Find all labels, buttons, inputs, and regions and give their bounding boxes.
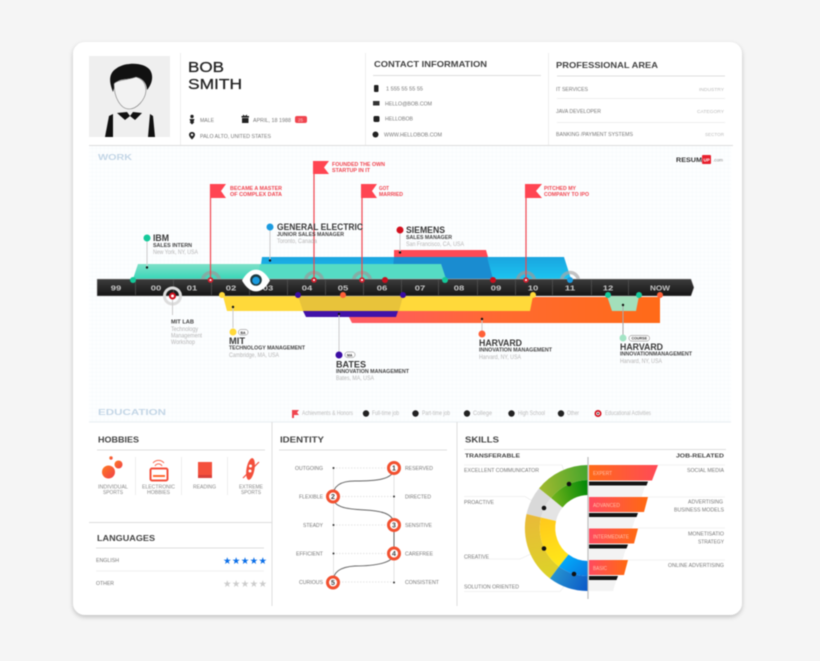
year labels: 99 [111, 286, 121, 292]
language: english: ENGLISH [96, 558, 119, 564]
job: General Electric: GENERAL ELECTRIC [277, 222, 363, 232]
education: Harvard: HARVARD [479, 338, 522, 348]
job: Siemens: San Francisco, CA, USA [406, 242, 464, 248]
legend: Full-time job [372, 411, 400, 417]
year labels: 12 [603, 286, 613, 292]
end dots [332, 467, 395, 584]
label: individual sports: SPORTS [103, 490, 124, 496]
marker numbers: 5 [331, 580, 335, 587]
logo: resumup: RESUM [676, 157, 702, 164]
timeline bar [97, 279, 694, 296]
job: IBM: New York, NY, USA [153, 250, 198, 256]
job: General Electric: Toronto, Canada [277, 239, 318, 245]
icon: extreme sports [243, 457, 259, 481]
icon: mail [373, 101, 380, 106]
heading: SKILLS [465, 434, 499, 444]
age badge [295, 116, 307, 123]
industry row [556, 87, 724, 93]
year labels [111, 286, 670, 292]
job: Siemens: SIEMENS [406, 225, 445, 235]
education bands [223, 296, 660, 323]
education: MIT: Cambridge, MA, USA [229, 353, 279, 359]
language: english [96, 556, 267, 567]
job: IBM: IBM [153, 233, 169, 243]
education: MIT Lab: Technology [171, 327, 198, 333]
category row: JAVA DEVELOPER [556, 109, 601, 115]
icon: individual sports [102, 456, 122, 478]
flag: master of complex data [208, 184, 282, 283]
location: PALO ALTO, UNITED STATES [200, 134, 271, 140]
year labels: 10 [528, 286, 538, 292]
flag: pitched company: PITCHED MY [544, 186, 577, 192]
job: Siemens [396, 225, 464, 254]
education: Bates: MA [347, 353, 353, 357]
job: IBM: SALES INTERN [153, 243, 192, 249]
industry row: IT SERVICES [556, 87, 588, 93]
job-related labels: ONLINE ADVERTISING [668, 563, 724, 569]
label: electronic hobbies: ELECTRONIC [142, 484, 175, 490]
year labels: 08 [454, 286, 464, 292]
right traits [405, 466, 440, 586]
education: MIT Lab [164, 288, 202, 346]
right traits: RESERVED [405, 466, 433, 472]
year labels: 03 [263, 286, 273, 292]
language: other: OTHER [96, 581, 114, 587]
education: Harvard course: HARVARD [620, 342, 663, 352]
transferable heading: TRANSFERABLE [465, 454, 520, 460]
flag: got married [359, 184, 403, 283]
flag: pitched company: COMPANY TO IPO [544, 192, 589, 198]
label: electronic hobbies: HOBBIES [147, 490, 171, 496]
job: General Electric: JUNIOR SALES MANAGER [277, 232, 344, 238]
education: Harvard [478, 318, 552, 361]
legend: College [473, 411, 493, 417]
panel: timeline [89, 146, 733, 422]
segment: blue [550, 554, 588, 591]
heading: HOBBIES [98, 434, 139, 444]
education: Harvard course [620, 304, 692, 365]
education label: EDUCATION [98, 408, 166, 417]
job-related heading: JOB-RELATED [676, 454, 724, 460]
transferable labels: EXCELLENT COMMUNICATOR [464, 468, 539, 474]
transferable labels: CREATIVE [464, 554, 489, 560]
education: MIT: TECHNOLOGY MANAGEMENT [229, 346, 305, 352]
left traits: CURIOUS [299, 580, 323, 586]
work bands [133, 250, 571, 279]
label: extreme sports: EXTREME [239, 484, 264, 490]
year labels: 06 [377, 286, 387, 292]
marker numbers: 4 [392, 551, 396, 558]
job-related labels [668, 468, 725, 569]
education: Bates: Bates, MA, USA [336, 376, 374, 382]
category row [556, 109, 724, 115]
name: BOB [188, 60, 224, 76]
education: Harvard course: INNOVATIONMANAGEMENT [620, 352, 692, 358]
language: other: ★★★★★ [223, 579, 267, 590]
legend [292, 410, 651, 418]
flag: pitched company [523, 184, 589, 283]
age badge: 25 [298, 118, 304, 122]
bar: expert: EXPERT [593, 471, 612, 477]
industry row: INDUSTRY [699, 87, 724, 92]
education: Bates: INNOVATION MANAGEMENT [336, 369, 409, 375]
scale lines [333, 468, 394, 582]
panel: contact information [372, 59, 541, 138]
icon: skype [374, 116, 380, 122]
legend: Other [567, 411, 579, 417]
education: Harvard course: COURSE [632, 337, 648, 341]
year labels: 09 [491, 286, 501, 292]
job-related labels: ADVERTISING [688, 500, 723, 506]
icon: location pin [189, 132, 195, 140]
education: Harvard course: Harvard, NY, USA [620, 359, 662, 365]
panel: skills [464, 434, 726, 599]
year labels: NOW [650, 286, 670, 292]
marker numbers: 3 [392, 522, 396, 530]
donut chart [525, 465, 588, 591]
education: MIT: MIT [229, 336, 246, 346]
flag halos [202, 272, 578, 290]
label: individual sports: INDIVIDUAL [98, 484, 128, 490]
education: Harvard: INNOVATION MANAGEMENT [479, 348, 552, 354]
job: General Electric [266, 222, 363, 262]
job-related labels: STRATEGY [698, 540, 724, 546]
year labels: 05 [338, 286, 348, 292]
icon: reading [198, 462, 212, 478]
heading: LANGUAGES [97, 533, 155, 543]
sector row [556, 132, 725, 138]
right traits: CONSISTENT [405, 580, 440, 586]
marker numbers: 1 [392, 466, 396, 472]
panel: profile [89, 56, 307, 140]
work label: WORK [98, 153, 132, 162]
transferable labels: PROACTIVE [464, 500, 494, 506]
flag: founded startup: FOUNDED THE OWN [332, 162, 385, 168]
flag: founded startup [311, 161, 385, 283]
transferable labels [464, 468, 539, 590]
bar: intermediate: INTERMEDIATE [593, 534, 630, 540]
logo: resumup: UP [704, 158, 710, 162]
icon: electronic hobbies [150, 460, 168, 480]
email: HELLO@BOB.COM [385, 102, 432, 108]
flag: founded startup: STARTUP IN IT [332, 168, 370, 174]
education: Bates [336, 313, 409, 382]
heading: CONTACT INFORMATION [374, 59, 487, 69]
flag: got married: MARRIED [379, 192, 403, 198]
current position marker [242, 270, 270, 291]
gender label: MALE [200, 118, 214, 124]
education: Harvard: Harvard, NY, USA [479, 355, 521, 361]
data points [542, 482, 576, 576]
label: individual sports [98, 484, 128, 496]
skype handle: HELLOBOB [385, 116, 413, 122]
birth date: APRIL, 18 1988 [253, 118, 291, 124]
panel: professional area [556, 60, 725, 138]
left traits: FLEXIBLE [299, 494, 323, 500]
heading: IDENTITY [280, 434, 324, 444]
year labels: 04 [302, 286, 312, 292]
logo: resumup: .com [713, 158, 723, 162]
right traits: SENSITIVE [405, 523, 432, 529]
education: MIT Lab: MIT LAB [171, 320, 194, 326]
year labels: 11 [565, 286, 575, 292]
trait curve [333, 468, 394, 582]
leader lines [464, 465, 725, 592]
education: MIT Lab: Workshop [171, 340, 196, 346]
photo: avatar [89, 56, 170, 137]
legend: Part-time job [422, 411, 451, 417]
segment: yellow [525, 514, 568, 578]
job: IBM [144, 233, 198, 269]
icon: gender [190, 115, 194, 124]
year labels: 00 [151, 286, 161, 292]
job-related labels: MONETISATIO [688, 532, 725, 538]
legend: Educational Activities [605, 411, 651, 417]
panel: identity [279, 434, 447, 588]
timeline dots [130, 277, 663, 298]
logo: resumup [676, 155, 723, 164]
bar: advanced: ADVANCED [593, 503, 620, 509]
language: other [96, 579, 267, 590]
marker numbers [331, 466, 396, 587]
transferable labels: SOLUTION ORIENTED [464, 584, 519, 590]
icon: phone [374, 85, 378, 92]
flag: got married: GOT [379, 186, 389, 192]
marker numbers: 2 [331, 494, 335, 501]
right traits: DIRECTED [405, 494, 431, 500]
label: extreme sports: SPORTS [241, 490, 262, 496]
left traits [295, 466, 324, 586]
label: electronic hobbies [142, 484, 175, 496]
year labels: 01 [187, 286, 197, 292]
year labels: 02 [226, 286, 236, 292]
left traits: STEADY [303, 523, 323, 529]
legend: Achievments & Honors [302, 411, 353, 417]
label: reading: READING [193, 484, 216, 490]
label: extreme sports [239, 484, 264, 496]
flag: master of complex data: OF COMPLEX DATA [230, 192, 282, 198]
education: Bates: BATES [336, 360, 366, 370]
language: english: ★★★★★ [223, 556, 267, 567]
icon: gift [242, 114, 249, 123]
education: MIT Lab: Management [171, 334, 202, 340]
left traits: OUTGOING [295, 466, 323, 472]
icon: globe [372, 132, 378, 138]
phone: 1 555 55 55 55 [386, 86, 423, 92]
sector row: BANKING /PAYMENT SYSTEMS [556, 132, 633, 138]
job: Siemens: SALES MANAGER [406, 235, 452, 241]
heading: PROFESSIONAL AREA [556, 60, 658, 70]
name: SMITH [188, 77, 242, 93]
job-related labels: BUSINESS MODELS [674, 508, 724, 514]
right traits: CAREFREE [405, 552, 433, 558]
legend: High School [518, 411, 545, 417]
panel: languages [96, 533, 267, 590]
bar: basic: BASIC [593, 566, 607, 572]
name [188, 60, 242, 93]
funnel chart [589, 465, 658, 591]
segment: grey [526, 488, 562, 521]
year labels: 07 [415, 286, 425, 292]
resume card [73, 42, 742, 615]
trait markers [328, 462, 400, 588]
sector row: SECTOR [705, 132, 725, 137]
job-related labels: SOCIAL MEDIA [687, 468, 724, 474]
category row: CATEGORY [697, 109, 724, 114]
education: MIT [229, 306, 305, 359]
website: WWW.HELLOBOB.COM [384, 132, 442, 138]
panel: hobbies [97, 434, 265, 496]
left traits: EFFICIENT [296, 552, 324, 558]
education: MIT: BA [240, 331, 246, 335]
segment: green [539, 465, 588, 508]
flag: master of complex data: BECAME A MASTER [230, 186, 282, 192]
